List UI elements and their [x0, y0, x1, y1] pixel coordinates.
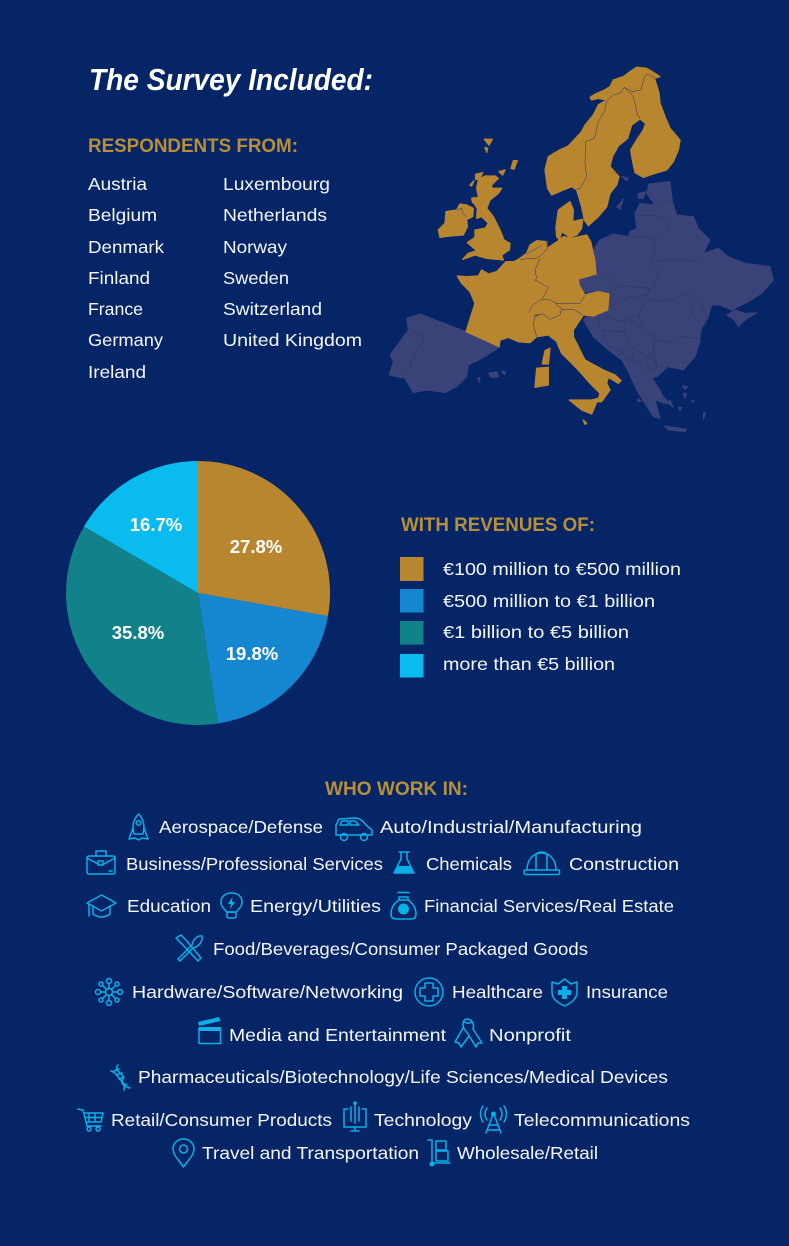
title: The Survey Included: [89, 62, 373, 97]
icon: light bulb [221, 893, 242, 918]
icon: utensils [176, 935, 202, 961]
industry list: Education [127, 896, 211, 916]
industry list: Technology [374, 1110, 472, 1130]
pie chart: 35.8% [112, 622, 164, 643]
non-surveyed countries: Spain and Portugal [389, 314, 506, 393]
country list: France [88, 299, 143, 319]
slice 16.7% [84, 461, 198, 593]
industry list: Business/Professional Services [126, 854, 383, 874]
icon: insurance shield [552, 979, 577, 1006]
legend: €500 million to €1 billion [443, 591, 655, 611]
industry list: Construction [569, 854, 679, 874]
industry list: Aerospace/Defense [159, 817, 323, 837]
country list: Finland [88, 268, 150, 288]
country list: Norway [223, 237, 287, 257]
country list: Germany [88, 330, 163, 350]
surveyed countries: UK, Ireland, France, Benelux, Germany, Denmark [438, 139, 596, 347]
industry list: Media and Entertainment [229, 1025, 446, 1045]
icon: technology monitor [344, 1101, 366, 1131]
industry list: Chemicals [426, 854, 512, 874]
industry list: Retail/Consumer Products [111, 1110, 332, 1130]
industry list: Auto/Industrial/Manufacturing [380, 817, 642, 837]
heading: respondents from: RESPONDENTS FROM: [88, 136, 298, 157]
industry list: Food/Beverages/Consumer Packaged Goods [213, 939, 588, 959]
industry list: Wholesale/Retail [457, 1143, 598, 1163]
slice 27.8% [198, 461, 330, 616]
icon: car [336, 818, 372, 840]
icon: graduation cap [87, 895, 116, 917]
country list: Ireland [88, 362, 146, 382]
industry list: Nonprofit [489, 1025, 571, 1045]
country list [88, 174, 362, 382]
legend [400, 557, 681, 678]
icon: healthcare cross [415, 978, 443, 1006]
pie chart [66, 461, 330, 725]
country list: Belgium [88, 205, 157, 225]
icon: clapperboard [198, 1017, 220, 1044]
icon: hard hat [524, 852, 560, 874]
icon: location pin [173, 1139, 194, 1167]
slice 35.8% [66, 526, 218, 725]
pie chart: 27.8% [230, 536, 282, 557]
industry list: Energy/Utilities [250, 896, 381, 916]
icon: DNA [111, 1065, 130, 1090]
legend: more than €5 billion [443, 654, 615, 674]
non-surveyed countries: eastern Europe [578, 177, 773, 432]
industry list: Travel and Transportation [202, 1143, 419, 1163]
industry list [78, 814, 690, 1167]
icon: money bag [391, 892, 416, 919]
icon: network [96, 978, 122, 1006]
country list: Netherlands [223, 205, 327, 225]
slice 19.8% [198, 593, 328, 724]
heading: who work in: WHO WORK IN: [325, 779, 468, 800]
industry list: Healthcare [452, 982, 543, 1002]
map of Europe [389, 67, 773, 432]
icon: antenna [480, 1106, 506, 1133]
surveyed countries: Italy, Switzerland, Austria and islands [529, 292, 621, 424]
country list: Austria [88, 174, 147, 194]
legend: €100 million to €500 million [443, 559, 681, 579]
industry list: Insurance [586, 982, 668, 1002]
icon: shopping cart [78, 1109, 103, 1131]
icon: rocket [129, 814, 148, 840]
country list: Luxembourg [223, 174, 330, 194]
icon: briefcase [87, 851, 115, 874]
industry list: Financial Services/Real Estate [424, 896, 674, 916]
legend: €1 billion to €5 billion [443, 622, 629, 642]
industry list: Hardware/Software/Networking [132, 982, 403, 1002]
surveyed countries: Scandinavia [545, 67, 680, 226]
industry list: Telecommunications [514, 1110, 690, 1130]
country list: Denmark [88, 237, 164, 257]
pie chart: 16.7% [130, 514, 182, 535]
heading: with revenues of: WITH REVENUES OF: [401, 515, 595, 536]
icon: flask [394, 852, 414, 873]
country list: United Kingdom [223, 330, 362, 350]
icon: hand truck [428, 1140, 450, 1166]
industry list: Pharmaceuticals/Biotechnology/Life Sciences/Medical Devices [138, 1067, 668, 1087]
country list: Switzerland [223, 299, 322, 319]
icon: ribbon [455, 1019, 482, 1047]
country list: Sweden [223, 268, 289, 288]
pie chart: 19.8% [226, 643, 278, 664]
